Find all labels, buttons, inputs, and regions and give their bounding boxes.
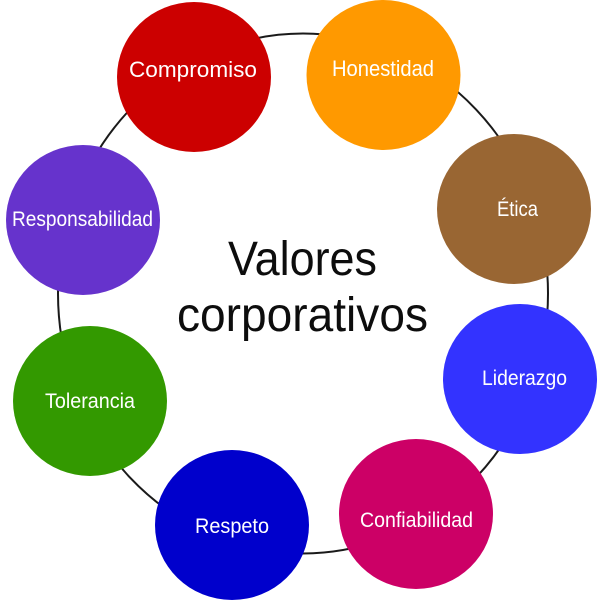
node: Ética <box>437 134 591 284</box>
central title: corporativos <box>177 289 428 342</box>
node: Tolerancia: Tolerancia <box>45 390 135 413</box>
central title: Valores <box>228 233 377 286</box>
node: Compromiso <box>117 2 271 152</box>
node: Responsabilidad: Responsabilidad <box>12 208 153 231</box>
node: Tolerancia <box>13 326 167 476</box>
node: Ética: Ética <box>497 198 538 221</box>
node: Honestidad <box>306 0 460 150</box>
node: Respeto <box>155 450 309 600</box>
node: Liderazgo: Liderazgo <box>482 367 567 390</box>
node: Respeto: Respeto <box>195 515 269 538</box>
node: Responsabilidad <box>6 145 160 295</box>
node: Confiabilidad <box>339 439 493 589</box>
connecting ring <box>58 34 548 554</box>
central title <box>177 233 428 342</box>
node: Compromiso: Compromiso <box>129 57 257 82</box>
node: Liderazgo <box>443 304 597 454</box>
node: Honestidad: Honestidad <box>332 56 434 81</box>
node: Confiabilidad: Confiabilidad <box>360 509 473 532</box>
